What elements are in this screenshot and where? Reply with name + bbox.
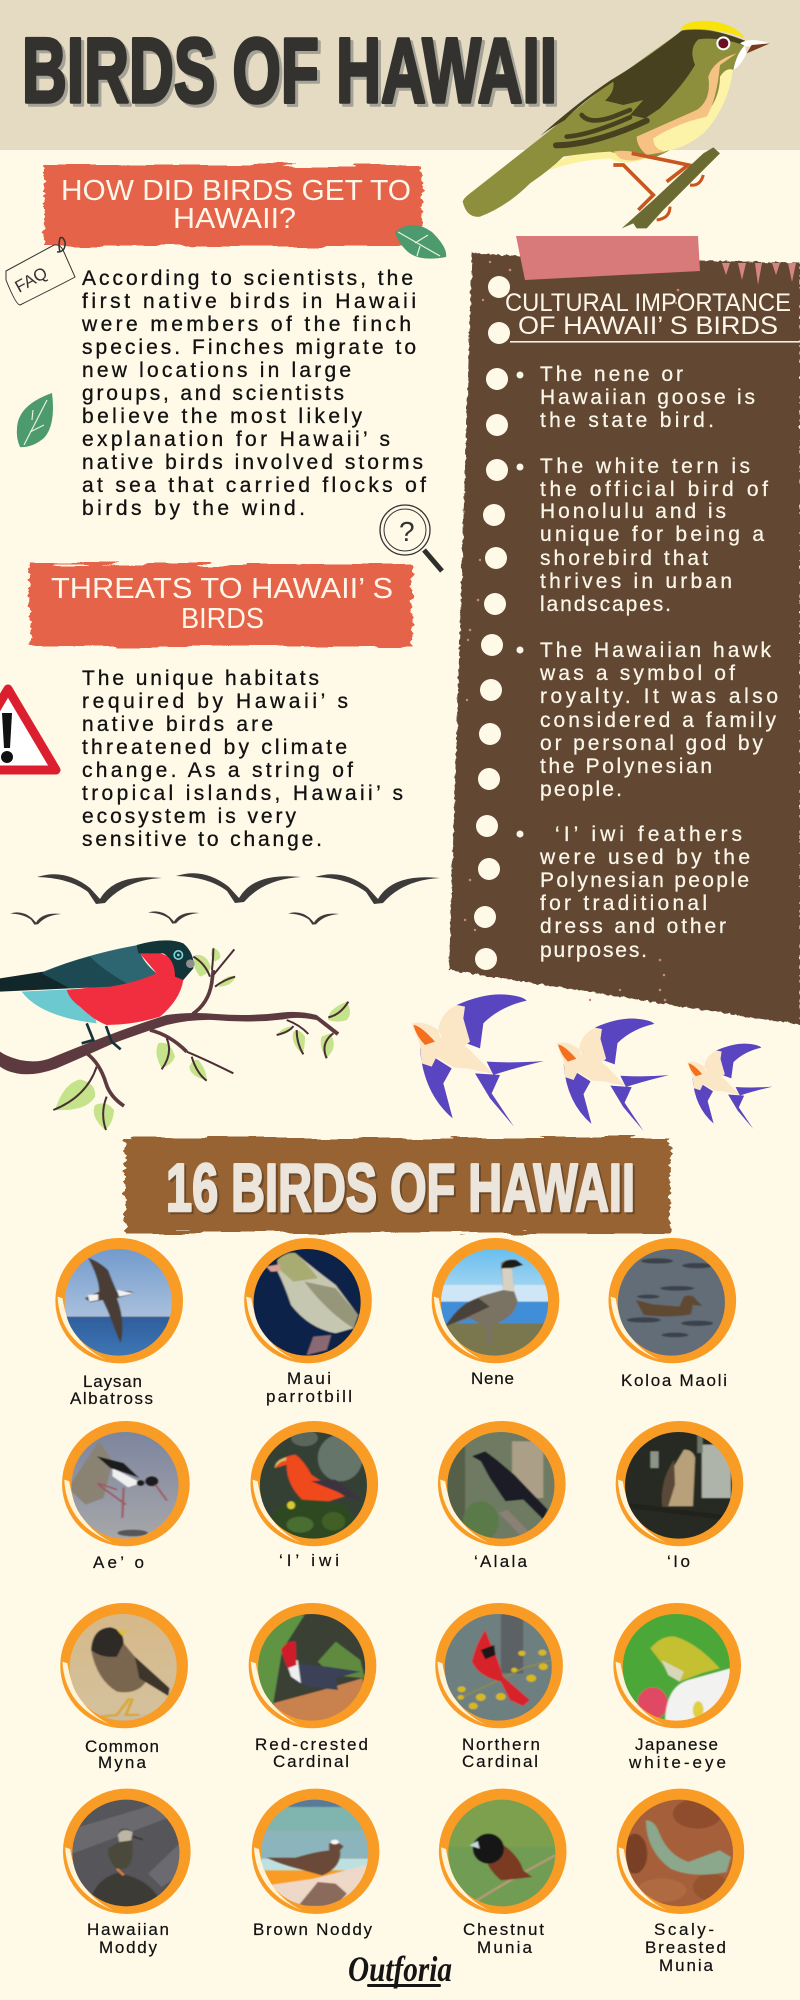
list: Hawaiian hawk: or personal god by: [540, 732, 764, 755]
list: white tern: Honolulu and is: [540, 500, 726, 523]
bird card: Northern Cardinal: Cardinal: [462, 1752, 538, 1771]
heading banner: how did birds get to Hawaii: HOW DID BIRDS GET TO: [61, 175, 411, 207]
list: nene: [516, 363, 755, 432]
list: white tern: [516, 455, 768, 616]
list: white tern: landscapes.: [540, 593, 671, 616]
title: BIRDS OF HAWAII: [22, 20, 557, 122]
panel heading: CULTURAL IMPORTANCE: [505, 289, 791, 317]
bird card: Nene: Nene: [471, 1369, 514, 1388]
bird card: Laysan Albatross: Albatross: [70, 1389, 153, 1408]
illustration: red bird on branch: [0, 940, 350, 1130]
text block: threats: [82, 667, 403, 851]
bird card: Common Myna: Myna: [98, 1753, 147, 1772]
bird card: Common Myna: [60, 1603, 188, 1772]
bird card: I'iwi: ‘I’ iwi: [279, 1551, 339, 1570]
icon: left leaf: [17, 393, 53, 447]
list: I'iwi feathers: ‘I’ iwi feathers: [555, 823, 742, 846]
list: white tern: thrives in urban: [540, 570, 732, 593]
bird card: Alala: ‘Alala: [474, 1552, 528, 1571]
illustration: olive bird on branch: [463, 21, 770, 228]
bird card: Common Myna: Common: [85, 1737, 159, 1756]
text block: how birds got to Hawaii: explanation for Hawaii’ s: [82, 428, 390, 451]
list: I'iwi feathers: dress and other: [540, 915, 726, 938]
bird card: Scaly-breasted Munia: Munia: [659, 1956, 714, 1975]
bird card: Japanese white-eye: [613, 1603, 741, 1772]
text block: how birds got to Hawaii: were members of the finch: [81, 313, 411, 336]
bird card: Koloa Maoli: Koloa Maoli: [621, 1371, 727, 1390]
list: I'iwi feathers: were used by the: [539, 846, 750, 869]
bird card: Maui parrotbill: [244, 1238, 372, 1406]
binder holes: [474, 276, 510, 970]
list: Hawaiian hawk: considered a family: [540, 709, 776, 732]
heading banner: threats: THREATS TO HAWAII’ S: [51, 573, 393, 605]
list: white tern: unique for being a: [540, 523, 764, 546]
icon: FAQ tag: [6, 238, 75, 305]
list: I'iwi feathers: [516, 823, 750, 962]
text block: threats: The unique habitats: [82, 667, 319, 690]
text block: how birds got to Hawaii: first native birds in Hawaii: [82, 290, 416, 313]
text block: how birds got to Hawaii: According to scientists, the: [82, 267, 413, 290]
text block: threats: change. As a string of: [82, 759, 353, 782]
bird card: Maui parrotbill: Maui: [287, 1369, 331, 1388]
text block: how birds got to Hawaii: birds by the wind.: [82, 497, 305, 520]
list: I'iwi feathers: purposes.: [540, 939, 647, 962]
list: I'iwi feathers: for traditional: [540, 892, 707, 915]
panel: cultural importance: [449, 253, 800, 1025]
icon: magnifying glass: [380, 505, 442, 571]
text block: threats: threatened by climate: [82, 736, 347, 759]
bird card: Brown Noddy: Brown Noddy: [253, 1920, 372, 1939]
list: white tern: shorebird that: [540, 547, 708, 570]
bird card: Northern Cardinal: [435, 1603, 563, 1771]
text block: how birds got to Hawaii: native birds involved storms: [82, 451, 423, 474]
bird card: I'iwi: [250, 1421, 378, 1570]
bird card: Scaly-breasted Munia: [617, 1789, 744, 1975]
text block: how birds got to Hawaii: species. Finches migrate to: [82, 336, 416, 359]
bird card: Japanese white-eye: Japanese: [635, 1735, 718, 1754]
text block: threats: native birds are: [82, 713, 273, 736]
list: white tern: the official bird of: [540, 478, 768, 501]
logo: Outforia: Outforia: [348, 1949, 452, 1989]
bird card: Red-crested Cardinal: Red-crested: [255, 1735, 368, 1754]
heading banner: how did birds get to Hawaii: [44, 165, 422, 246]
list: Hawaiian hawk: the Polynesian: [540, 755, 712, 778]
list: white tern: The white tern is: [540, 455, 750, 478]
bird card: Io: [616, 1421, 743, 1571]
text block: threats: sensitive to change.: [82, 828, 322, 851]
bird card: Brown Noddy: [252, 1789, 379, 1939]
title: BIRDS OF HAWAII: [25, 23, 560, 125]
text block: threats: required by Hawaii’ s: [82, 690, 348, 713]
list: Hawaiian hawk: The Hawaiian hawk: [540, 639, 772, 662]
bird card: Northern Cardinal: Northern: [462, 1735, 540, 1754]
bird card: Scaly-breasted Munia: Breasted: [645, 1938, 726, 1957]
icon: FAQ tag: FAQ: [12, 263, 51, 296]
bird card: Laysan Albatross: Laysan: [83, 1372, 142, 1391]
heading banner: threats: BIRDS: [181, 603, 264, 635]
title: [22, 20, 560, 125]
panel heading: [505, 289, 800, 343]
text block: threats: tropical islands, Hawaii’ s: [82, 782, 403, 805]
icon: magnifying glass: ?: [399, 516, 415, 547]
list: Hawaiian hawk: royalty. It was also: [540, 685, 778, 708]
leaves: [55, 947, 350, 1130]
panel heading: OF HAWAII’ S BIRDS: [518, 312, 778, 340]
bird card: Ae'o: [62, 1421, 190, 1572]
heading banner: threats: [30, 564, 412, 646]
bird card: Hawaiian Moddy: [63, 1789, 191, 1957]
list: nene: Hawaiian goose is: [540, 386, 755, 409]
bird card: Koloa Maoli: [608, 1238, 736, 1390]
panel speckles: [464, 261, 796, 1001]
bird card: Chestnut Munia: Chestnut: [463, 1920, 544, 1939]
bird card: Alala: [438, 1421, 566, 1571]
bird card: Ae'o: Ae’ o: [93, 1553, 144, 1572]
bird card: Maui parrotbill: parrotbill: [266, 1387, 352, 1406]
heading banner: how did birds get to Hawaii: HAWAII?: [173, 203, 296, 235]
bird card: Japanese white-eye: white-eye: [628, 1753, 726, 1772]
bird card: Red-crested Cardinal: [249, 1603, 376, 1771]
list: Hawaiian hawk: people.: [540, 778, 622, 801]
illustration: three swallows: [412, 994, 773, 1131]
bird card: Nene: [432, 1238, 559, 1388]
bird card: Hawaiian Moddy: Moddy: [99, 1938, 158, 1957]
text block: how birds got to Hawaii: believe the most likely: [82, 405, 362, 428]
header band: [0, 0, 800, 150]
icon: warning triangle: [0, 689, 56, 770]
list: I'iwi feathers: Polynesian people: [540, 869, 749, 892]
bird card: Chestnut Munia: Munia: [477, 1938, 533, 1957]
bird card: Scaly-breasted Munia: Scaly-: [654, 1920, 714, 1939]
bird card: Laysan Albatross: [55, 1238, 183, 1408]
flock of small birds: [10, 873, 440, 925]
text block: threats: ecosystem is very: [82, 805, 296, 828]
heading banner: 16 birds of Hawaii: [125, 1138, 670, 1233]
bird card: Hawaiian Moddy: Hawaiian: [87, 1920, 169, 1939]
bird card: Chestnut Munia: [439, 1789, 567, 1957]
list: nene: the state bird.: [540, 409, 714, 432]
text block: how birds got to Hawaii: at sea that carried flocks of: [82, 474, 426, 497]
text block: how birds got to Hawaii: groups, and scientists: [82, 382, 344, 405]
text block: how birds got to Hawaii: [81, 267, 426, 520]
icon: top leaf: [395, 225, 446, 259]
list: Hawaiian hawk: [516, 639, 778, 801]
text block: how birds got to Hawaii: new locations in large: [82, 359, 351, 382]
list: Hawaiian hawk: was a symbol of: [539, 662, 735, 685]
bird card: Io: ‘Io: [667, 1552, 690, 1571]
bird card: Red-crested Cardinal: Cardinal: [273, 1752, 349, 1771]
panel tape: [516, 236, 700, 280]
list: nene: The nene or: [540, 363, 683, 386]
